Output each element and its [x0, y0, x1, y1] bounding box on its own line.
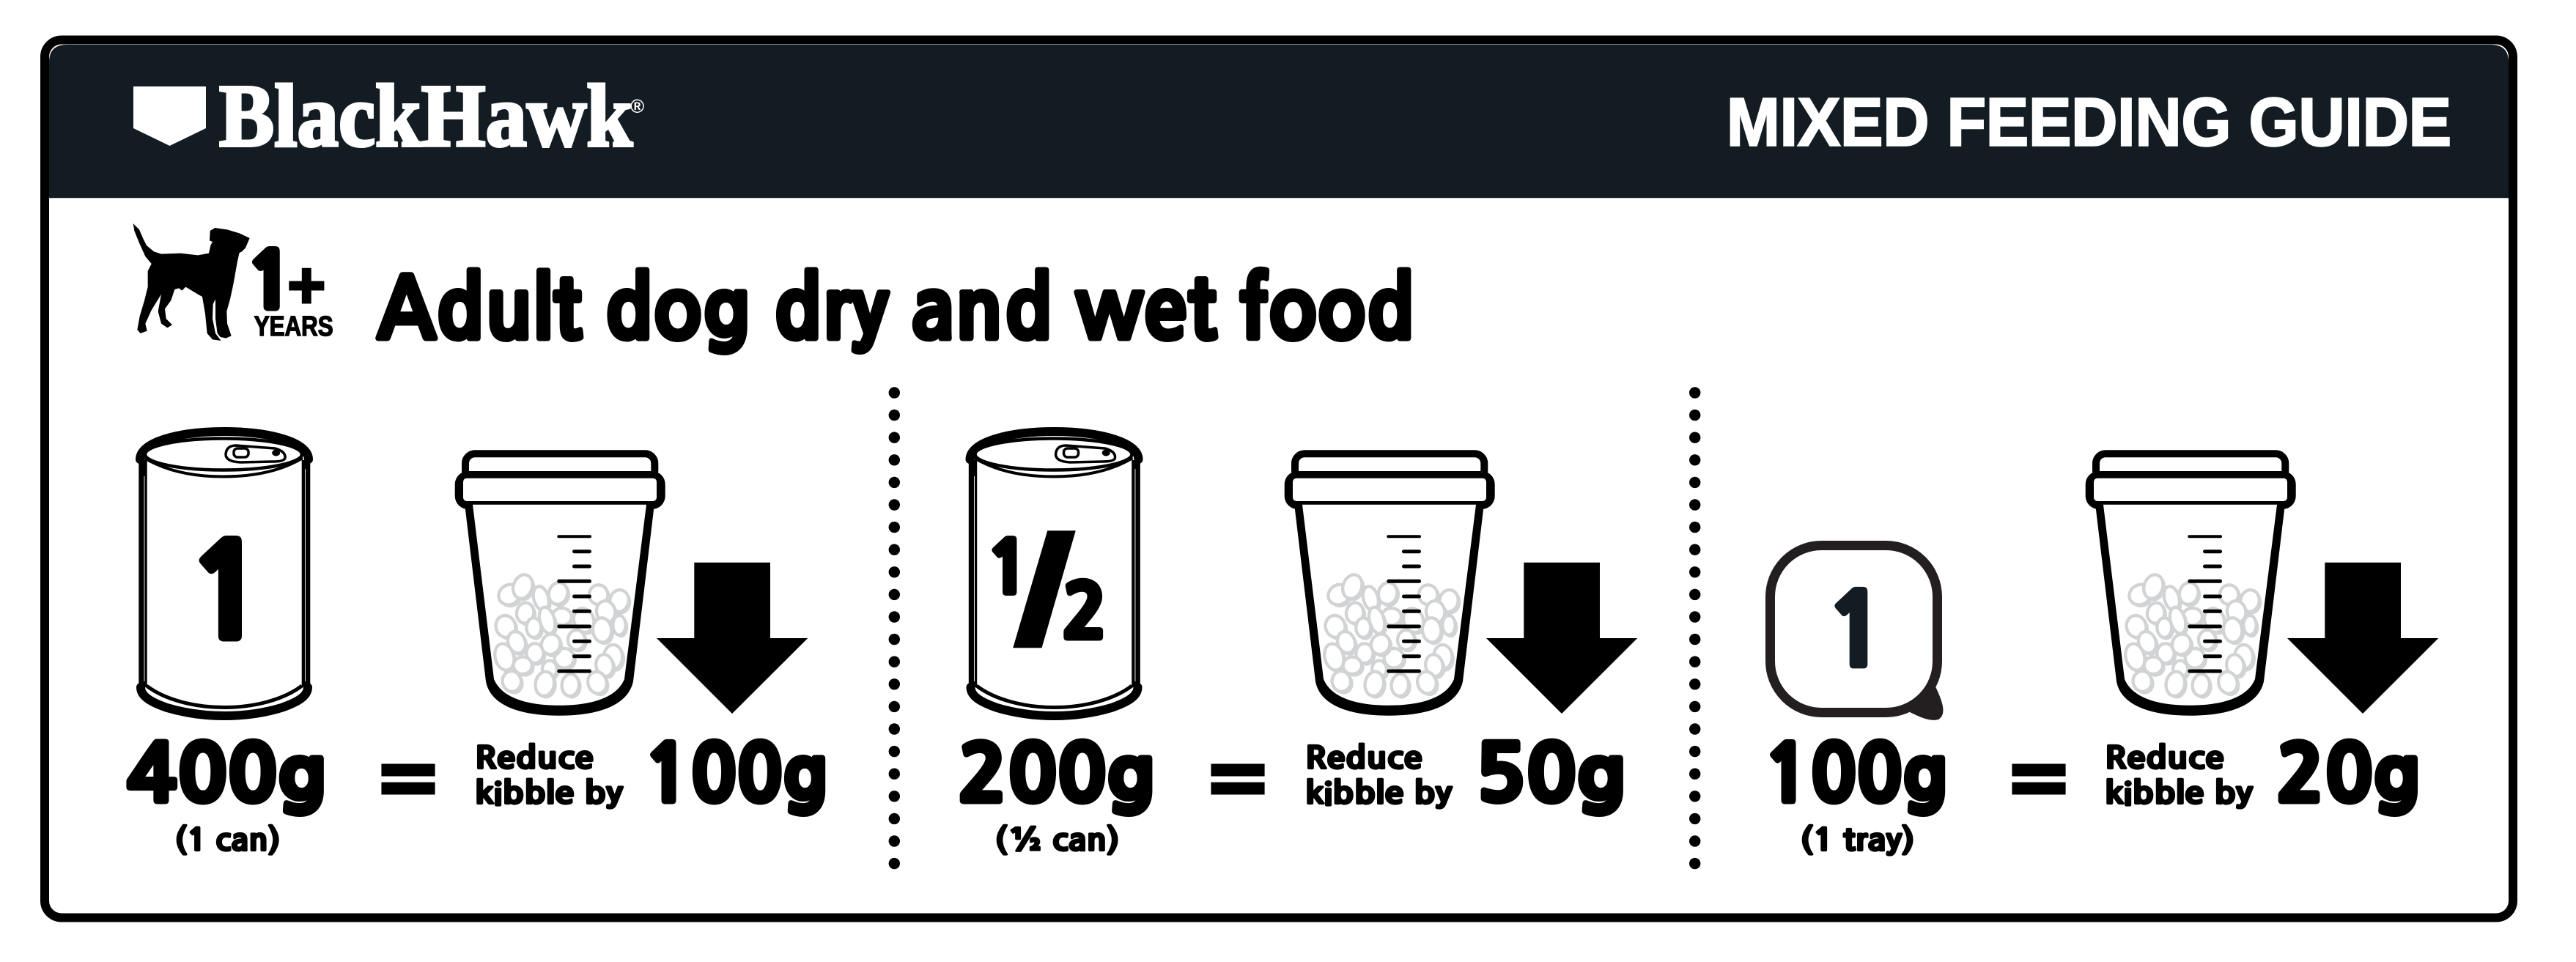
- amount: 100g: 100g: [1764, 736, 1948, 815]
- divider: [1689, 387, 1700, 869]
- reduce label: kibble by: [1305, 778, 1453, 809]
- reduce amount: 50g: 50g: [1475, 736, 1626, 815]
- icon: tray: [1771, 545, 1943, 720]
- logo shield: [133, 86, 206, 146]
- icon: measuring cup: [455, 454, 665, 716]
- header bar: [49, 45, 2509, 198]
- can label: 1: 1: [188, 528, 267, 657]
- arrow: reduce: [2287, 563, 2438, 714]
- reduce label: Reduce: [1305, 743, 1422, 773]
- panel: 200g half can: [958, 432, 1637, 855]
- reduce label: Reduce: [475, 743, 594, 773]
- logo: BlackHawk: [133, 67, 644, 166]
- panel: 100g tray: [1764, 454, 2438, 856]
- years label: YEARS: [254, 311, 333, 342]
- reduce label: [2105, 743, 2254, 809]
- reduce amount: 100g: 100g: [644, 736, 828, 815]
- reduce label: kibble by: [475, 778, 624, 809]
- equals sign: =: [1211, 741, 1265, 816]
- can label: one half: 2: [1062, 574, 1107, 649]
- reduce label: Reduce: [2105, 743, 2224, 773]
- equals sign: =: [2012, 741, 2066, 816]
- arrow: reduce: [657, 563, 808, 714]
- registered mark: ®: [630, 95, 644, 117]
- amount: 200g: 200g: [958, 736, 1155, 815]
- plus sign: +: [287, 249, 326, 322]
- icon: half can: [969, 432, 1140, 716]
- logo wordmark: BlackHawk: [219, 67, 632, 166]
- title: mixed feeding guide: MIXED FEEDING GUIDE: [1727, 84, 2451, 160]
- equals sign: =: [381, 741, 435, 816]
- divider: [889, 387, 900, 869]
- icon: measuring cup: [1285, 454, 1495, 716]
- reduce label: [475, 743, 624, 809]
- age badge: 1+ years: [247, 243, 333, 342]
- reduce label: [1305, 743, 1453, 809]
- tray label: 1: 1: [1826, 581, 1886, 681]
- amount: 400g: 400g: [127, 736, 327, 815]
- reduce amount: 20g: 20g: [2276, 736, 2421, 815]
- amount note: (1 tray): [1801, 824, 1914, 856]
- can label: one half: [986, 502, 1107, 678]
- icon: dog silhouette: [133, 223, 250, 341]
- amount note: (1 can): [175, 824, 280, 855]
- can label: one half: 1: [986, 533, 1030, 604]
- heading: Adult dog dry and wet food: [377, 267, 1414, 353]
- can label: one half: /: [1011, 502, 1078, 678]
- amount note: (½ can): [995, 824, 1119, 855]
- icon: measuring cup: [2086, 454, 2296, 716]
- arrow: reduce: [1486, 563, 1637, 714]
- panel: 400g can: [127, 432, 828, 855]
- icon: can: [139, 432, 310, 716]
- reduce label: kibble by: [2105, 778, 2254, 809]
- age number: 1: [247, 243, 293, 319]
